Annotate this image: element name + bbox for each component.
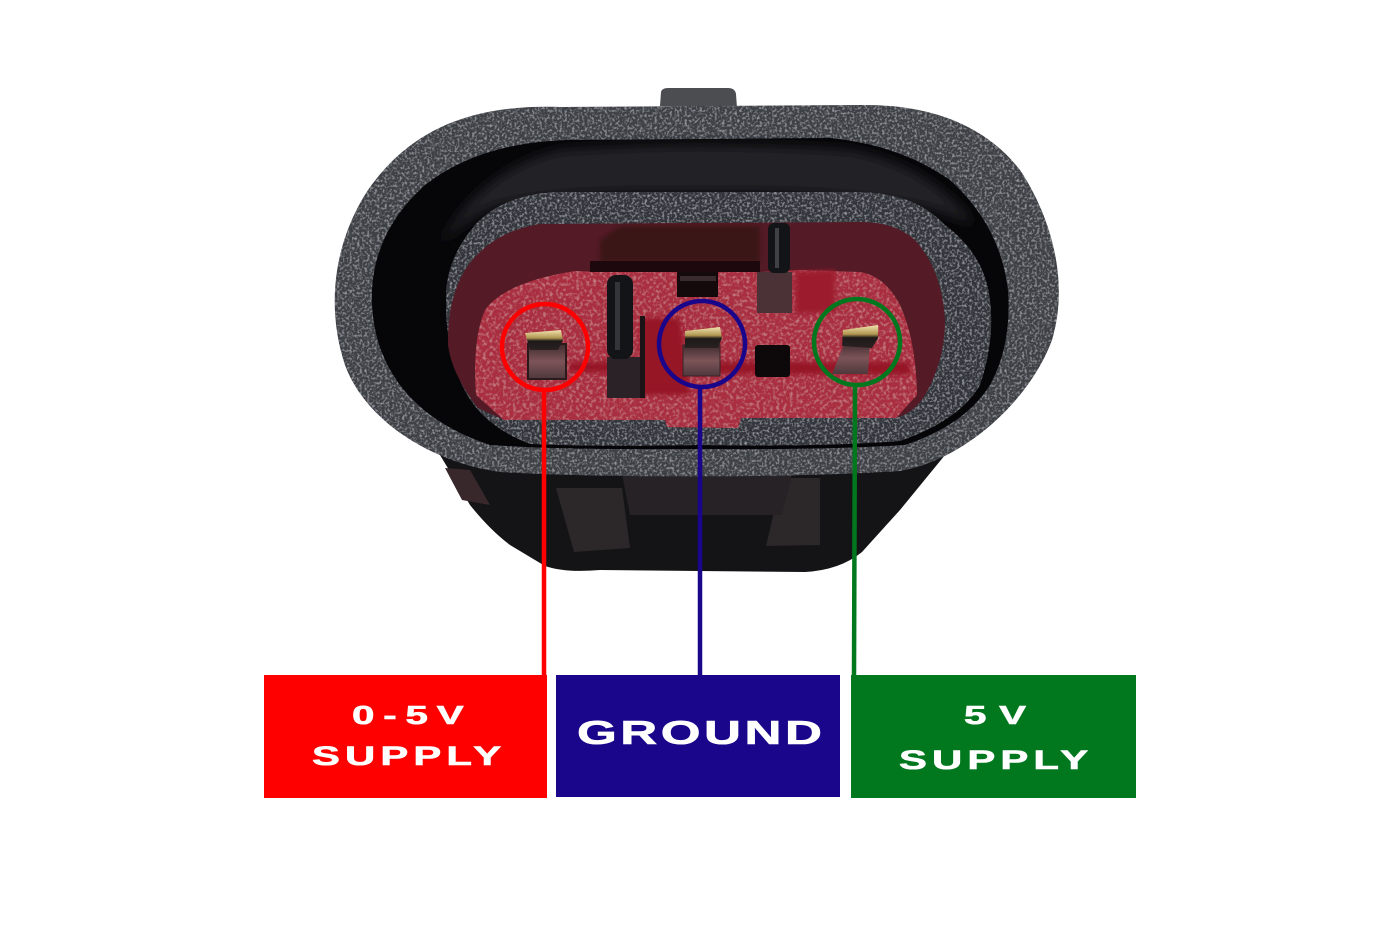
lower connector body (440, 455, 945, 572)
label: 0-5V supply: SUPPLY (312, 741, 501, 771)
polarising key left (607, 275, 645, 398)
label: 0-5V supply (264, 675, 547, 798)
pin marker: ground (659, 301, 745, 676)
body clips (556, 474, 820, 552)
label: 5V supply: SUPPLY (899, 745, 1088, 775)
outer rim (335, 105, 1059, 476)
label: ground: GROUND (577, 715, 822, 752)
pin 2 (683, 327, 722, 376)
top slot (677, 272, 718, 297)
inner cavity (372, 138, 1009, 449)
square hole (755, 345, 790, 377)
label: 5V supply (851, 675, 1136, 798)
label: ground (556, 675, 840, 797)
inner plug rim (446, 192, 991, 446)
red housing (448, 222, 945, 428)
locking tab (660, 88, 737, 108)
lit red face (475, 270, 917, 428)
pin 1 (525, 330, 566, 379)
connector photo (335, 88, 1059, 572)
pin marker: 5V (814, 299, 900, 676)
pin shadows (570, 318, 910, 395)
black ledge (590, 261, 760, 272)
label: 0-5V supply: 0-5V (352, 701, 464, 730)
dark upper band (600, 226, 760, 262)
polarising key right (757, 223, 792, 313)
label: 5V supply: 5V (964, 701, 1026, 730)
pin 3 (832, 325, 878, 374)
pin marker: 0-5V (502, 304, 588, 676)
